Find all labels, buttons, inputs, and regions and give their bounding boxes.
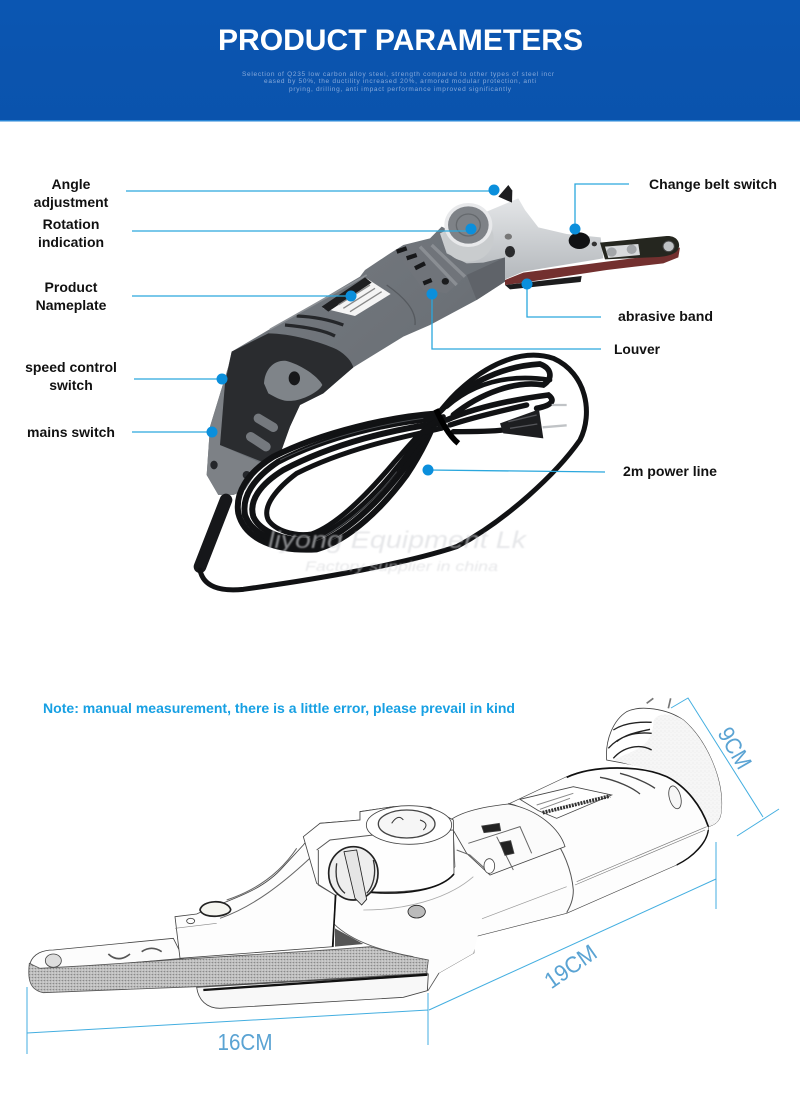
head dark arc bbox=[370, 874, 454, 893]
angle lever bbox=[498, 185, 512, 203]
head screws bbox=[505, 234, 512, 240]
front cone facets bbox=[467, 257, 505, 300]
line drawing of sander: head and belt bbox=[29, 806, 487, 1008]
header subtitle: eased by 50%, the ductility increased 20%, armored modular protection, anti bbox=[264, 78, 536, 85]
callout: louver: Louver bbox=[614, 341, 661, 357]
rear screws bbox=[210, 461, 218, 469]
header subtitle: prying, drilling, anti impact performance improved significantly bbox=[289, 86, 512, 93]
belt arm plate bbox=[600, 236, 679, 259]
right bundle bbox=[440, 364, 552, 432]
abrasive belt bbox=[29, 947, 428, 993]
watermark: Factory supplier in china bbox=[305, 558, 498, 574]
dial knob bbox=[443, 215, 494, 262]
silver head bbox=[440, 198, 603, 279]
plug bbox=[500, 405, 567, 438]
dial bbox=[366, 806, 452, 844]
nameplate bbox=[323, 278, 391, 316]
rear grey shell bbox=[207, 352, 262, 495]
callout: mains switch: mains switch bbox=[27, 424, 115, 440]
callout: mains switch bbox=[27, 424, 218, 440]
belt change button bbox=[569, 232, 590, 249]
line drawing of sander: motor and grip bbox=[427, 698, 722, 990]
watermark: liyong Equipment Lk bbox=[268, 527, 528, 554]
callout: louver bbox=[426, 288, 661, 357]
louver grille bbox=[395, 242, 467, 293]
callout: 2m power line bbox=[422, 463, 717, 479]
dimension: 9CM: 9CM bbox=[713, 722, 757, 774]
head screw bbox=[408, 905, 425, 918]
button bbox=[200, 902, 231, 916]
lower plate bbox=[197, 974, 428, 1008]
dimension: 16CM: 16CM bbox=[218, 1029, 272, 1055]
header subtitle bbox=[242, 71, 555, 93]
dimension: 9CM bbox=[671, 698, 779, 836]
handle grey inlay bbox=[264, 361, 322, 401]
motor slots bbox=[600, 773, 655, 794]
grip vents bbox=[608, 722, 652, 758]
callout: angle adjustment: adjustment bbox=[34, 194, 109, 210]
lower black plate bbox=[505, 276, 582, 289]
callout: angle adjustment bbox=[34, 176, 500, 210]
callout: abrasive band bbox=[522, 278, 713, 324]
motor nameplate bbox=[520, 787, 612, 818]
belt end plate bbox=[30, 938, 183, 970]
measurement note: Note: manual measurement, there is a little error, please prevail in kind bbox=[43, 700, 515, 716]
abrasive band bbox=[505, 247, 680, 285]
motor vents bbox=[285, 316, 343, 336]
cord sleeve bbox=[200, 500, 226, 567]
collar seam bbox=[387, 285, 415, 325]
dimension: 16CM bbox=[27, 987, 428, 1055]
product photo: belt sander bbox=[207, 185, 680, 495]
cord tie bbox=[436, 409, 458, 443]
watermark bbox=[268, 527, 528, 574]
callout: speed control switch bbox=[25, 359, 228, 393]
callout: change belt switch bbox=[570, 176, 777, 234]
lock lever bbox=[329, 847, 378, 900]
sanding arm bbox=[175, 807, 405, 958]
header subtitle: Selection of Q235 low carbon alloy steel, strength compared to other types of steel incr bbox=[242, 71, 555, 78]
head block bbox=[303, 807, 454, 895]
callout: angle adjustment: Angle bbox=[52, 176, 91, 192]
cord highlights bbox=[280, 418, 423, 537]
callout: change belt switch: Change belt switch bbox=[649, 176, 777, 192]
callout: product nameplate bbox=[36, 279, 356, 313]
motor seam lines bbox=[575, 827, 707, 885]
callout: abrasive band: abrasive band bbox=[618, 308, 713, 324]
handle slots bbox=[258, 418, 273, 427]
callout: product nameplate: Nameplate bbox=[36, 297, 107, 313]
collar bbox=[508, 803, 573, 913]
dark gap bbox=[333, 895, 336, 947]
louver area bbox=[448, 804, 565, 875]
callout: rotation indication: Rotation bbox=[43, 216, 99, 232]
cord stub bbox=[647, 698, 671, 708]
dimension: 19CM bbox=[429, 842, 716, 1010]
rear grip bbox=[606, 708, 722, 827]
motor cylinder bbox=[427, 768, 708, 990]
main loop bbox=[200, 355, 586, 590]
callout: rotation indication bbox=[38, 216, 476, 250]
callout: 2m power line: 2m power line bbox=[623, 463, 717, 479]
left bundle bbox=[238, 413, 443, 550]
callout: speed control switch: switch bbox=[49, 377, 93, 393]
dimension: 19CM: 19CM bbox=[539, 939, 602, 994]
callout: speed control switch: speed control bbox=[25, 359, 117, 375]
header banner bbox=[0, 0, 800, 122]
lower body under head bbox=[333, 873, 487, 991]
title: PRODUCT PARAMETERS bbox=[218, 24, 583, 57]
power cord with plug bbox=[200, 355, 586, 590]
callout: product nameplate: Product bbox=[45, 279, 98, 295]
callout: rotation indication: indication bbox=[38, 234, 104, 250]
sander body bbox=[207, 227, 505, 495]
dark rubber handle bbox=[220, 333, 353, 462]
